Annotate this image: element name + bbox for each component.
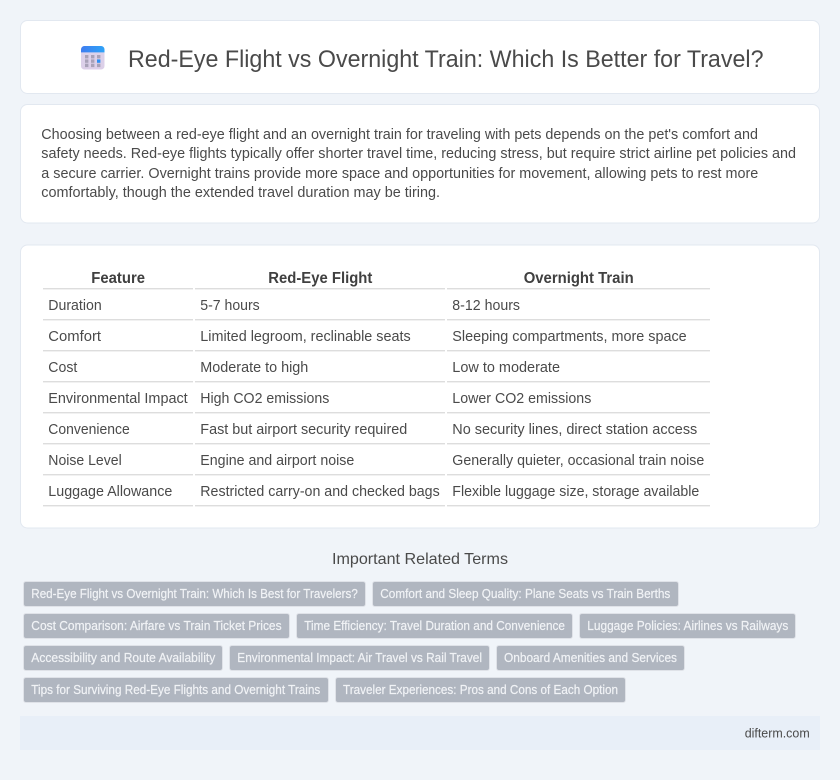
- chip: environmental impact: [230, 646, 490, 670]
- text block: introduction paragraph: [41, 126, 796, 201]
- table row: environmental impact: High CO2 emissions: [200, 390, 329, 407]
- table row: convenience: No security lines, direct station access: [452, 421, 697, 438]
- footer brand: difterm.com: [745, 725, 810, 740]
- chip: luggage policies: Luggage Policies: Airlines vs Railways: [587, 618, 789, 633]
- chip: comfort and sleep: Comfort and Sleep Quality: Plane Seats vs Train Berths: [380, 586, 671, 601]
- panel: comparison table: [20, 245, 820, 528]
- footer: [20, 716, 820, 750]
- table row: duration: 5-7 hours: [200, 297, 260, 314]
- chip: time efficiency: Time Efficiency: Travel Duration and Convenience: [304, 618, 565, 633]
- table header row: Overnight Train: [524, 270, 634, 287]
- chip: cost comparison: Cost Comparison: Airfare vs Train Ticket Prices: [31, 618, 282, 633]
- related term chips: [24, 582, 796, 702]
- text block: introduction paragraph: Choosing between a red-eye flight and an overnight train for traveling with pets depends on the pet's comfort and: [41, 126, 758, 143]
- chip: onboard amenities: Onboard Amenities and Services: [504, 650, 677, 665]
- chip: accessibility: [24, 646, 222, 670]
- table row: comfort: Comfort: [48, 328, 102, 345]
- table row: noise level: [43, 452, 710, 475]
- table header row: [43, 270, 710, 289]
- chip: comfort and sleep: [372, 582, 678, 606]
- chip: tips: [24, 678, 328, 702]
- table row: convenience: [43, 421, 710, 444]
- table row: luggage allowance: Flexible luggage size, storage available: [452, 483, 699, 500]
- table header row: Red-Eye Flight: [268, 270, 373, 287]
- table row: environmental impact: [43, 390, 710, 413]
- table row: convenience: Fast but airport security required: [200, 421, 407, 438]
- chip: traveler experiences: [336, 678, 626, 702]
- chip: luggage policies: [580, 614, 796, 638]
- chip: best for travelers: [24, 582, 366, 606]
- table row: noise level: Generally quieter, occasional train noise: [452, 452, 704, 469]
- panel: introduction: [20, 104, 820, 223]
- chip: tips: Tips for Surviving Red-Eye Flights and Overnight Trains: [31, 682, 321, 697]
- table row: noise level: Noise Level: [48, 452, 122, 469]
- table row: luggage allowance: [43, 483, 710, 506]
- title: Red-Eye Flight vs Overnight Train: Which Is Better for Travel?: [128, 46, 764, 73]
- panel: header: [20, 20, 820, 94]
- table row: luggage allowance: Restricted carry-on and checked bags: [200, 483, 440, 500]
- chip: onboard amenities: [496, 646, 684, 670]
- table row: environmental impact: Lower CO2 emissions: [452, 390, 591, 407]
- text block: introduction paragraph: safety needs. Red-eye flights typically offer shorter travel time, reducing stress, but require strict airline pet policies and: [41, 145, 796, 162]
- table header row: Feature: [91, 270, 145, 287]
- table row: duration: [43, 297, 710, 320]
- icon: calendar: [81, 46, 104, 70]
- table row: cost: Moderate to high: [200, 359, 308, 376]
- table row: convenience: Convenience: [48, 421, 130, 438]
- table row: cost: [43, 359, 710, 382]
- text block: introduction paragraph: comfortably, though the extended travel duration may be tiring.: [41, 184, 440, 201]
- chip: best for travelers: Red-Eye Flight vs Overnight Train: Which Is Best for Travelers?: [31, 586, 358, 601]
- table row: comfort: Sleeping compartments, more space: [452, 328, 687, 345]
- table row: duration: Duration: [48, 297, 102, 314]
- table row: cost: Cost: [48, 359, 78, 376]
- table row: environmental impact: Environmental Impact: [48, 390, 188, 407]
- table row: comfort: [43, 328, 710, 351]
- chip: time efficiency: [296, 614, 572, 638]
- chip: traveler experiences: Traveler Experiences: Pros and Cons of Each Option: [343, 682, 618, 697]
- chip: environmental impact: Environmental Impact: Air Travel vs Rail Travel: [237, 650, 482, 665]
- text block: introduction paragraph: a secure carrier. Overnight trains provide more space and opportunities for movement, allowing pets to rest more: [41, 165, 758, 182]
- table row: luggage allowance: Luggage Allowance: [48, 483, 172, 500]
- table row: cost: Low to moderate: [452, 359, 560, 376]
- chip: cost comparison: [24, 614, 290, 638]
- table row: comfort: Limited legroom, reclinable seats: [200, 328, 411, 345]
- chip: accessibility: Accessibility and Route Availability: [31, 650, 216, 665]
- table row: noise level: Engine and airport noise: [200, 452, 354, 469]
- table row: duration: 8-12 hours: [452, 297, 520, 314]
- heading: related terms: Important Related Terms: [332, 551, 508, 568]
